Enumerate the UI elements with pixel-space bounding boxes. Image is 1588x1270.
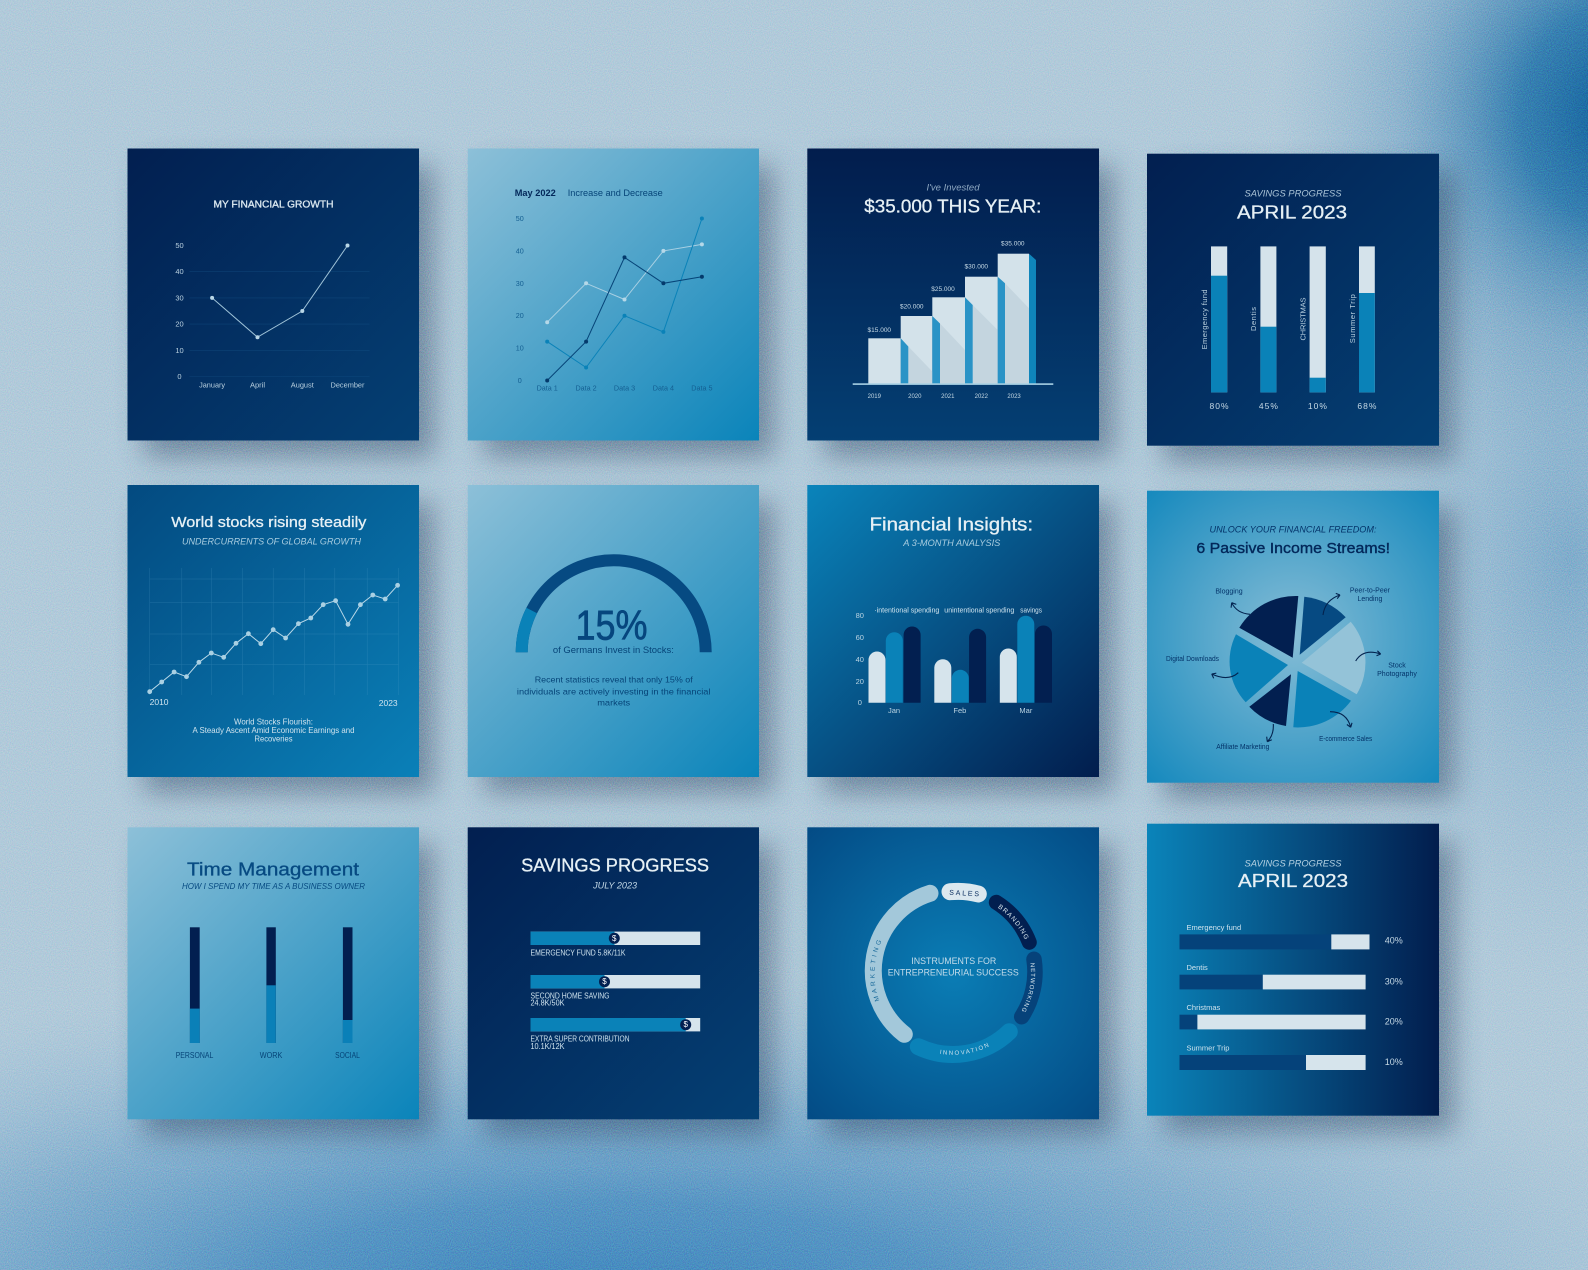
slice labels: Affiliate Marketing bbox=[1216, 744, 1269, 751]
title: my financial growth: MY FINANCIAL GROWTH bbox=[214, 200, 334, 211]
panel: savings progress July 2023 bbox=[468, 827, 759, 1119]
panel: world stocks rising bbox=[128, 485, 419, 777]
multi-line chart: Data 4 bbox=[653, 383, 674, 392]
ring segment: networking: NETWORKING bbox=[1022, 963, 1036, 1012]
multi-line chart: Data 3 bbox=[614, 383, 635, 392]
arrows bbox=[1212, 593, 1381, 742]
multi-line chart: 20 bbox=[516, 311, 524, 320]
grouped bar chart: 40 bbox=[856, 655, 864, 664]
progress bar: emergency fund: EMERGENCY FUND 5.8K/11K bbox=[531, 948, 626, 957]
vertical progress bars: 45% bbox=[1259, 401, 1278, 411]
grouped bar chart: Feb bbox=[953, 706, 966, 715]
vertical progress bars: 80% bbox=[1210, 401, 1229, 411]
progress bar: second home saving: 24.8K/50K bbox=[531, 998, 565, 1007]
ring segment: innovation bbox=[910, 1023, 1018, 1063]
vertical bars: SOCIAL bbox=[335, 1051, 360, 1060]
vertical bars: WORK bbox=[260, 1051, 283, 1060]
grouped bar chart: 60 bbox=[856, 633, 864, 642]
grouped bar chart: 20 bbox=[856, 677, 864, 686]
progress bar: extra super contribution: 10.1K/12K bbox=[531, 1042, 565, 1051]
stepped bar chart: $15.000 bbox=[868, 327, 891, 334]
body text: Recent statistics reveal that only 15% of bbox=[535, 675, 693, 685]
stepped bar chart: 2020 bbox=[908, 394, 922, 400]
ring segment: networking bbox=[1014, 952, 1043, 1024]
line chart with grid: 2010 bbox=[150, 697, 169, 707]
caption: world stocks flourish: A Steady Ascent Amid Economic Earnings and bbox=[192, 725, 355, 735]
panel: savings progress April 2023 horizontal bars bbox=[1147, 824, 1439, 1116]
multi-line chart: 50 bbox=[516, 214, 524, 223]
center text bbox=[888, 956, 1019, 978]
line chart: January bbox=[199, 380, 225, 389]
ring segment: sales: SALES bbox=[949, 890, 981, 898]
center text: ENTREPRENEURIAL SUCCESS bbox=[888, 968, 1019, 978]
progress bar: second home saving bbox=[530, 975, 700, 1008]
row: christmas: 20% bbox=[1385, 1017, 1403, 1027]
line chart: 50 bbox=[175, 241, 184, 250]
multi-line chart: Data 2 bbox=[576, 383, 597, 392]
panel: invested bar chart bbox=[807, 148, 1099, 440]
line chart: December bbox=[330, 380, 365, 389]
legend bbox=[874, 606, 1042, 614]
ring segment: marketing bbox=[864, 884, 938, 1043]
body text: individuals are actively investing in the financial bbox=[517, 686, 711, 696]
kicker: savings progress: SAVINGS PROGRESS bbox=[1244, 189, 1342, 199]
row: summer trip: Summer Trip bbox=[1186, 1044, 1229, 1053]
progress bar: extra super contribution bbox=[530, 1018, 700, 1051]
panel: instruments for entrepreneurial success bbox=[807, 827, 1099, 1120]
row: christmas bbox=[1180, 1003, 1403, 1029]
slice labels: Lending bbox=[1357, 596, 1382, 603]
grouped bar chart: Jan bbox=[888, 706, 900, 715]
row: summer trip: 10% bbox=[1385, 1057, 1403, 1067]
caption: world stocks flourish: World Stocks Flourish: bbox=[234, 716, 313, 726]
subtitle: 3-month analysis: A 3-MONTH ANALYSIS bbox=[902, 538, 1000, 548]
grouped bar chart bbox=[856, 611, 1052, 715]
title: April 2023: APRIL 2023 bbox=[1237, 202, 1347, 222]
grouped bar chart: 80 bbox=[856, 611, 864, 620]
slice labels: E-commerce Sales bbox=[1319, 736, 1373, 743]
legend: savings bbox=[1020, 606, 1042, 614]
line chart: 10 bbox=[175, 346, 184, 355]
stepped bar chart: 2019 bbox=[868, 394, 882, 400]
slice labels: Peer-to-Peer bbox=[1350, 588, 1391, 595]
legend: ·intentional spending bbox=[874, 606, 939, 614]
line chart: 40 bbox=[175, 267, 184, 276]
stepped bar chart: $30.000 bbox=[965, 263, 988, 270]
caption: world stocks flourish bbox=[192, 716, 355, 744]
panel: passive income pie chart bbox=[1147, 491, 1439, 783]
grouped bar chart: Mar bbox=[1019, 706, 1033, 715]
row: emergency fund: Emergency fund bbox=[1186, 923, 1241, 932]
row: dentis: Dentis bbox=[1186, 963, 1208, 972]
ring segment: branding: BRANDING bbox=[998, 904, 1028, 939]
title: financial insights: Financial Insights: bbox=[870, 514, 1033, 534]
panel: financial insights bbox=[807, 485, 1099, 777]
stepped bar chart: 2023 bbox=[1007, 394, 1021, 400]
label: of Germans invest in stocks: of Germans Invest in Stocks: bbox=[553, 645, 674, 655]
slice labels: Photography bbox=[1377, 671, 1417, 678]
row: dentis: 30% bbox=[1385, 976, 1403, 986]
slice labels: Stock bbox=[1388, 663, 1406, 670]
line chart: 20 bbox=[175, 320, 184, 329]
row: dentis bbox=[1180, 963, 1403, 989]
vertical bars: PERSONAL bbox=[176, 1051, 214, 1060]
title: April 2023: APRIL 2023 bbox=[1238, 871, 1348, 891]
line chart: August bbox=[291, 380, 315, 389]
heading: May 2022: May 2022 bbox=[515, 188, 556, 198]
panel: 15% gauge bbox=[468, 485, 759, 777]
caption: world stocks flourish: Recoveries bbox=[254, 734, 292, 744]
gauge arc bbox=[522, 560, 706, 652]
multi-line chart: 40 bbox=[516, 246, 524, 255]
panel: May 2022 increase and decrease chart bbox=[468, 148, 759, 440]
title: savings progress: SAVINGS PROGRESS bbox=[521, 856, 709, 876]
progress bar: emergency fund: $ bbox=[612, 934, 617, 943]
multi-line chart: 0 bbox=[518, 376, 522, 385]
legend: unintentional spending bbox=[944, 606, 1014, 614]
subtitle: July 2023: JULY 2023 bbox=[592, 880, 637, 890]
title: 6 passive income streams: 6 Passive Income Streams! bbox=[1196, 540, 1390, 557]
progress bar: emergency fund bbox=[530, 932, 700, 958]
multi-line chart: Data 5 bbox=[691, 383, 712, 392]
vertical progress bars: 68% bbox=[1357, 401, 1377, 411]
vertical progress bars: 10% bbox=[1308, 401, 1327, 411]
ring segment: innovation: INNOVATION bbox=[940, 1042, 989, 1055]
center text: INSTRUMENTS FOR bbox=[911, 956, 997, 966]
panel: savings progress April 2023 vertical bars bbox=[1147, 154, 1439, 446]
line chart bbox=[175, 241, 370, 389]
row: emergency fund bbox=[1180, 923, 1403, 949]
stepped bar chart bbox=[853, 240, 1053, 400]
panel: time management bbox=[128, 827, 419, 1119]
slice labels: Digital Downloads bbox=[1166, 656, 1219, 663]
progress bar: second home saving: $ bbox=[602, 977, 607, 986]
grouped bar chart: 0 bbox=[858, 698, 862, 707]
vertical progress bars: Dentis bbox=[1249, 307, 1258, 331]
stepped bar chart: 2022 bbox=[975, 394, 989, 400]
subtitle: undercurrents of global growth: UNDERCURRENTS OF GLOBAL GROWTH bbox=[182, 537, 361, 547]
subtitle: how I spend my time: HOW I SPEND MY TIME AS A BUSINESS OWNER bbox=[182, 882, 365, 891]
title: $35.000 this year: $35.000 THIS YEAR: bbox=[864, 196, 1041, 216]
row: emergency fund: 40% bbox=[1385, 936, 1403, 946]
multi-line chart bbox=[516, 214, 712, 392]
title: world stocks rising steadily: World stocks rising steadily bbox=[171, 514, 367, 531]
progress bar: extra super contribution: $ bbox=[683, 1020, 688, 1029]
multi-line chart: 30 bbox=[516, 279, 524, 288]
kicker: unlock your financial freedom: UNLOCK YOUR FINANCIAL FREEDOM: bbox=[1210, 524, 1377, 534]
vertical bars bbox=[176, 927, 360, 1060]
title: time management: Time Management bbox=[187, 859, 359, 879]
row: christmas: Christmas bbox=[1186, 1003, 1221, 1012]
panel: my financial growth line chart bbox=[128, 148, 419, 440]
stepped bar chart: 2021 bbox=[941, 394, 955, 400]
vertical progress bars: CHRISTMAS bbox=[1298, 298, 1308, 340]
exploded pie chart bbox=[1230, 596, 1365, 727]
stepped bar chart: $35.000 bbox=[1001, 240, 1025, 247]
line chart: 30 bbox=[175, 293, 184, 302]
line chart with grid bbox=[147, 568, 400, 708]
progress bar: extra super contribution: EXTRA SUPER CONTRIBUTION bbox=[531, 1034, 630, 1043]
multi-line chart: 10 bbox=[516, 344, 524, 353]
vertical progress bars: Emergency fund bbox=[1200, 289, 1209, 349]
line chart: 0 bbox=[177, 372, 182, 381]
kicker: savings progress: SAVINGS PROGRESS bbox=[1244, 859, 1342, 869]
body text: markets bbox=[597, 697, 630, 707]
ring segment: marketing: MARKETING bbox=[870, 940, 881, 1002]
body text bbox=[517, 675, 711, 707]
ring segment: branding bbox=[988, 894, 1037, 950]
stepped bar chart: $20.000 bbox=[900, 303, 924, 310]
line chart: April bbox=[250, 380, 265, 389]
row: summer trip bbox=[1180, 1044, 1403, 1070]
vertical progress bars bbox=[1200, 246, 1377, 411]
slice labels: Blogging bbox=[1215, 589, 1243, 596]
vertical progress bars: Summer Trip bbox=[1348, 294, 1357, 343]
slice labels bbox=[1166, 588, 1417, 751]
big number: 15%: 15% bbox=[576, 602, 648, 648]
kicker: I've invested: I've Invested bbox=[926, 182, 981, 192]
stepped bar chart: $25.000 bbox=[931, 286, 955, 293]
multi-line chart: Data 1 bbox=[537, 383, 558, 392]
line chart with grid: 2023 bbox=[379, 698, 398, 708]
subheading: increase and decrease: Increase and Decrease bbox=[568, 188, 663, 198]
progress bar: second home saving: SECOND HOME SAVING bbox=[531, 991, 610, 1000]
